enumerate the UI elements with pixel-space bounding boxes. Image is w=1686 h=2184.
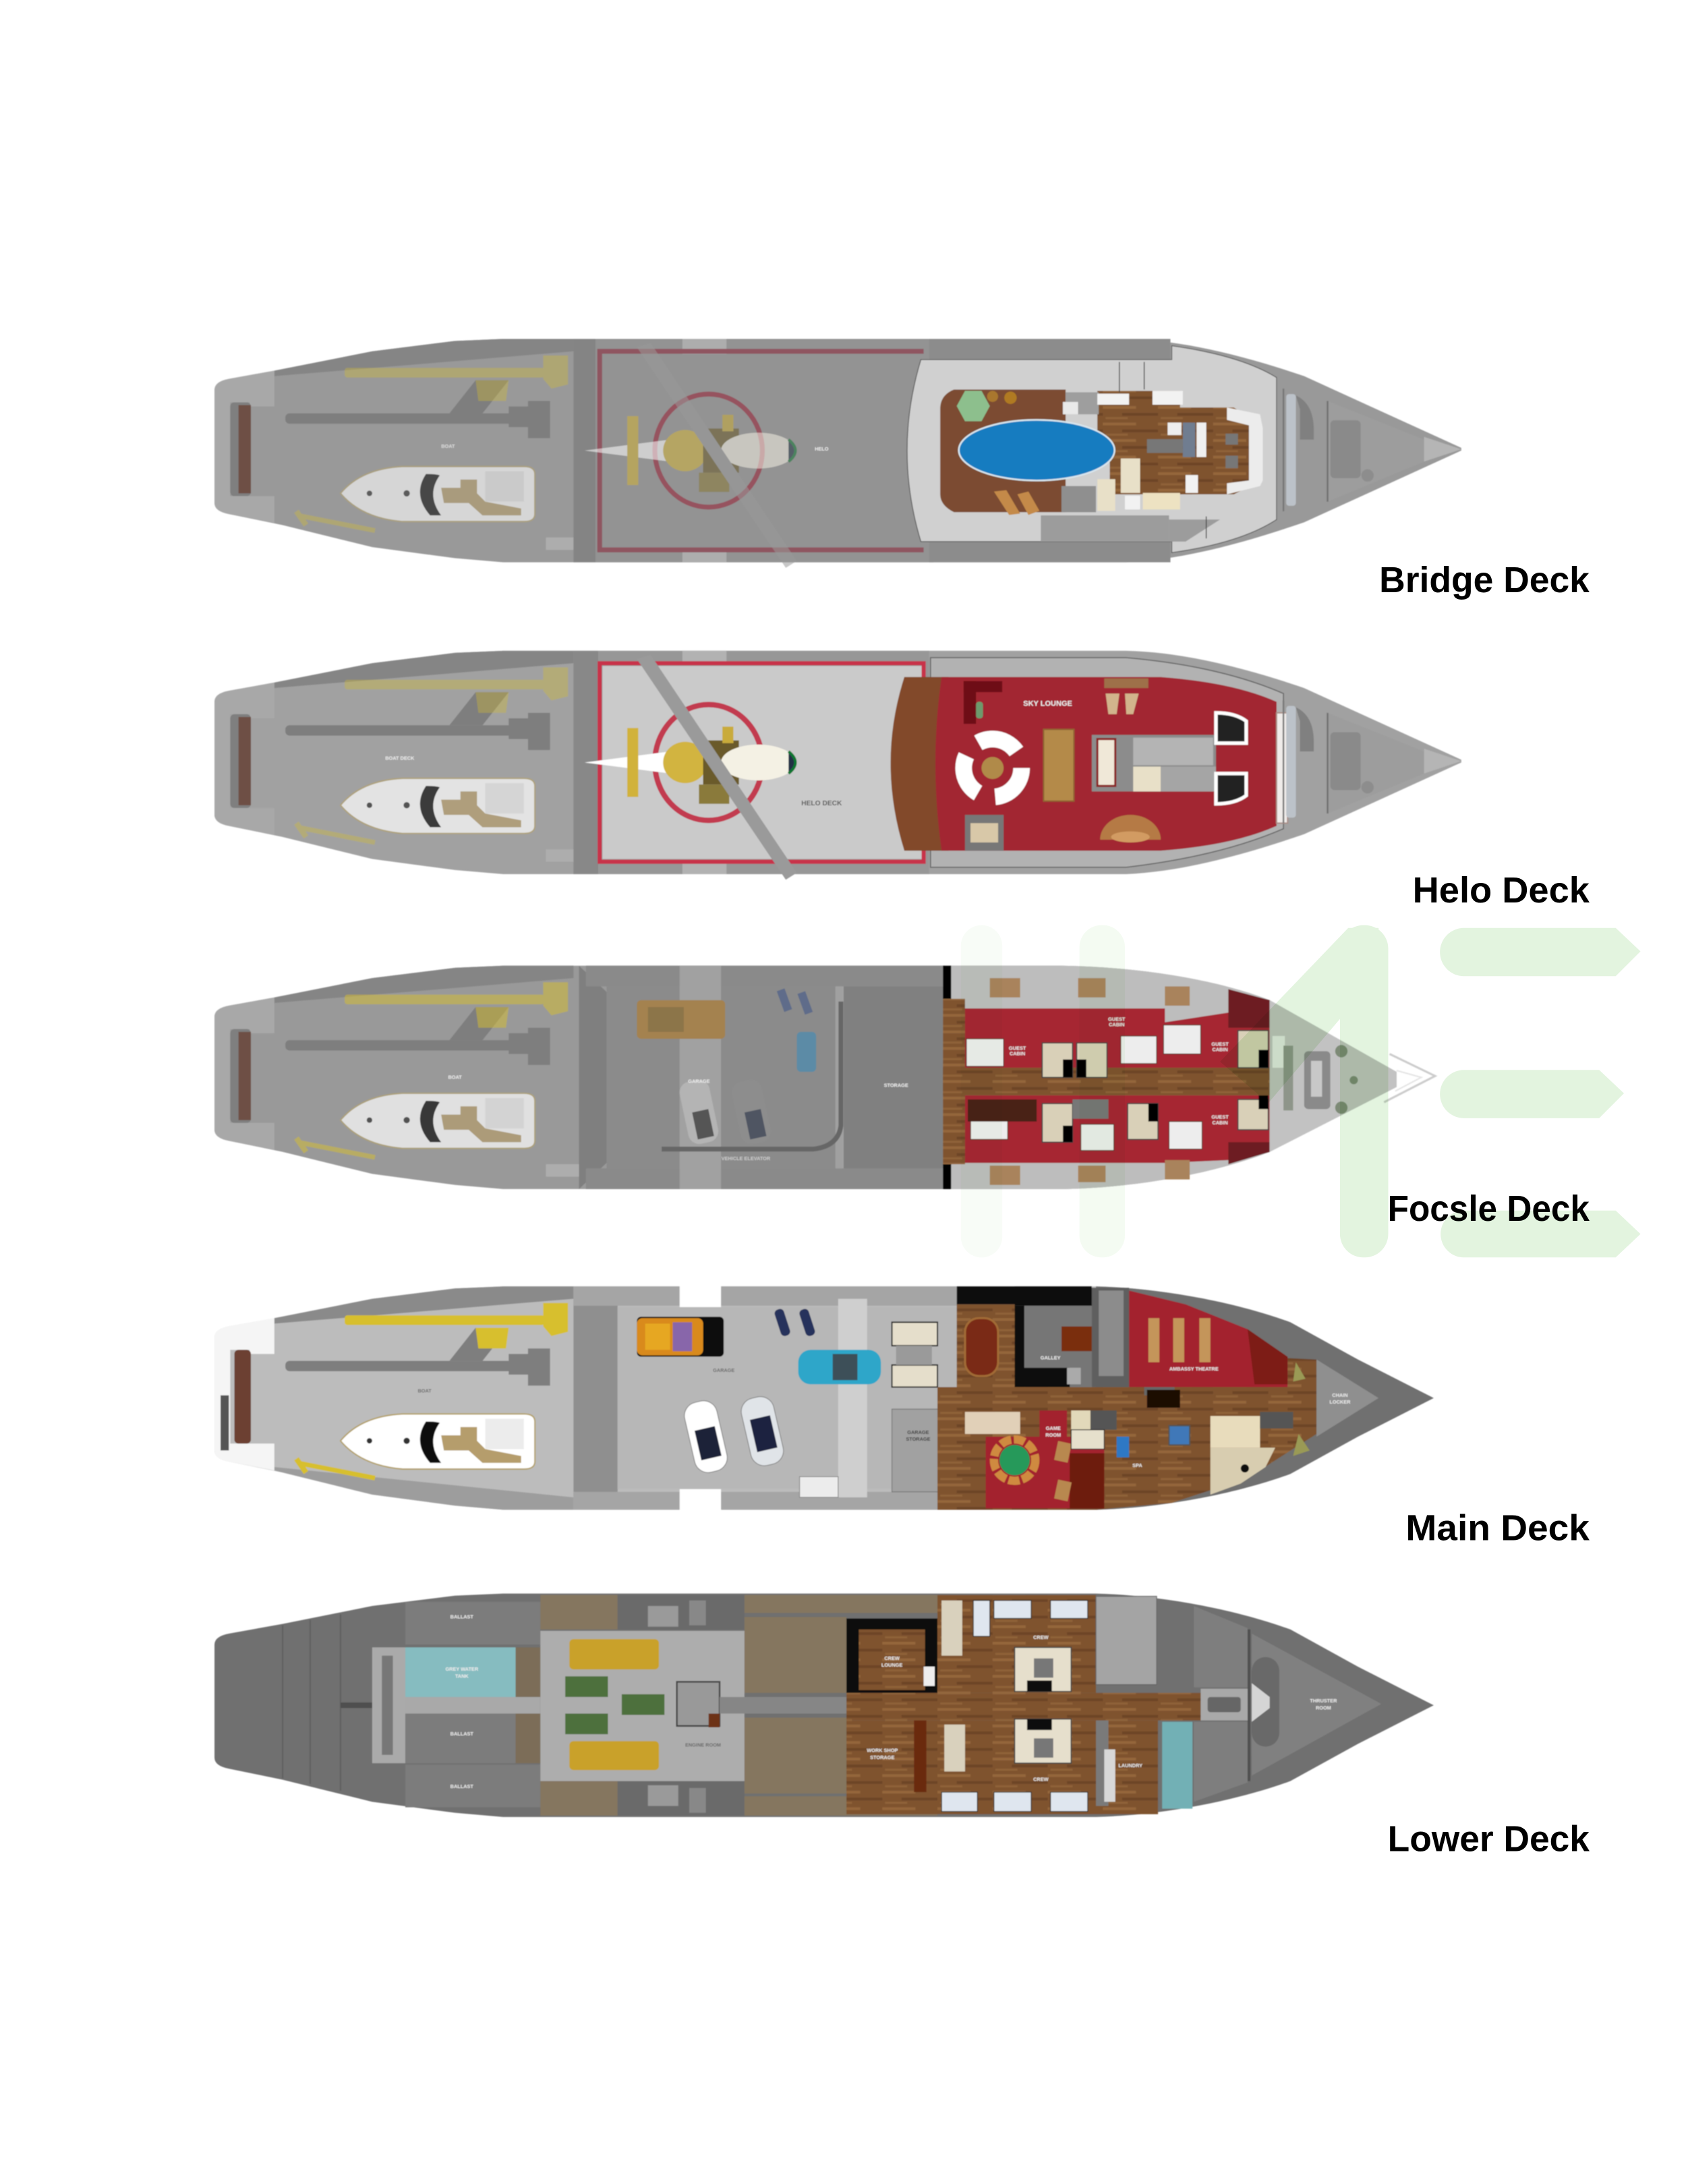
game room: GAME — [1046, 1425, 1061, 1431]
beds and bathrooms: GUEST — [1009, 1045, 1026, 1051]
hull — [214, 1286, 1434, 1510]
crew cabins: WORK SHOP — [867, 1748, 898, 1754]
interior wood — [937, 1304, 1316, 1510]
sun deck wood — [940, 390, 1066, 512]
label: Lower Deck: Lower Deck — [1388, 1820, 1590, 1860]
interior furnishings: SKY LOUNGE — [1023, 700, 1072, 708]
beds and bathrooms: CABIN — [1010, 1051, 1025, 1057]
storage panel: GARAGE — [907, 1429, 929, 1435]
hull — [214, 651, 1461, 874]
aft tanks: BALLAST — [450, 1783, 473, 1789]
aft boat deck — [214, 651, 591, 862]
beds and bathrooms: GUEST — [1108, 1016, 1126, 1023]
dining table — [1043, 729, 1074, 801]
bow compartment — [1249, 1630, 1381, 1781]
bow compartment: THRUSTER — [1310, 1698, 1337, 1704]
watermark — [961, 925, 1641, 1257]
crew cabins — [867, 1601, 1088, 1812]
bow compartment: ROOM — [1316, 1704, 1331, 1711]
crew area wood — [846, 1595, 1200, 1814]
galley: GALLEY — [1041, 1355, 1061, 1361]
aft boat deck: BOAT — [448, 1074, 462, 1080]
icon: plants — [1293, 1362, 1310, 1456]
label: Helo Deck: Helo Deck — [1413, 871, 1590, 911]
laundry: LAUNDRY — [1118, 1762, 1142, 1769]
garage: VEHICLE ELEVATOR — [722, 1155, 771, 1161]
deck plan: Focsle Deck — [214, 966, 1435, 1189]
icon: engines — [569, 1639, 659, 1770]
storage panel — [892, 1409, 957, 1492]
theatre — [1129, 1290, 1287, 1408]
helipad — [573, 651, 929, 880]
beds and bathrooms: CABIN — [1212, 1046, 1228, 1052]
sky lounge carpet — [935, 677, 1277, 851]
vehicle: blue car — [798, 1350, 881, 1384]
label: Focsle Deck: Focsle Deck — [1388, 1189, 1590, 1229]
forward lower wedge — [1169, 519, 1220, 542]
vehicle: motorcycles — [774, 1308, 816, 1337]
helipad: HELO — [815, 446, 829, 452]
side decks — [931, 658, 1283, 867]
icon: crew gensets — [565, 1676, 664, 1734]
chain locker bow: LOCKER — [1329, 1399, 1351, 1405]
crew cabins: STORAGE — [870, 1754, 894, 1760]
forward side panels — [1194, 1606, 1248, 1802]
crew lounge: LOUNGE — [881, 1662, 902, 1668]
lower grey area — [1041, 515, 1169, 542]
forward bow band — [1096, 1286, 1434, 1510]
owner suite: SPA — [1132, 1462, 1142, 1468]
garage: STORAGE — [884, 1083, 908, 1089]
stern platform — [214, 1286, 573, 1510]
garage — [573, 1284, 957, 1512]
curved bars — [1216, 713, 1246, 804]
bow foredeck — [1270, 1000, 1435, 1152]
circular sofa — [964, 739, 1022, 797]
superstructure — [907, 346, 1277, 552]
engine room — [540, 1631, 745, 1781]
service compartments — [618, 1595, 745, 1816]
aft tanks: BALLAST — [450, 1731, 473, 1737]
deck plan: Bridge Deck — [214, 339, 1461, 568]
chain locker bow — [1316, 1360, 1378, 1437]
theatre: AMBASSY THEATRE — [1169, 1366, 1219, 1372]
deck plan: Helo Deck — [214, 651, 1461, 880]
teak deck — [891, 677, 948, 851]
interior furnishings — [964, 679, 1149, 851]
hull — [214, 339, 1461, 563]
aft boat deck — [214, 966, 591, 1177]
crew vehicles — [892, 1322, 937, 1387]
crew lounge — [846, 1618, 937, 1693]
aft boat deck: BOAT DECK — [385, 755, 415, 761]
interior wood — [1097, 391, 1250, 494]
crew mess — [957, 1286, 1014, 1376]
tan fuel tanks — [540, 1595, 937, 1816]
crew cabins: CREW — [1033, 1777, 1049, 1783]
aft tanks: GREY WATER — [445, 1666, 479, 1672]
deck plan: Main Deck — [214, 1284, 1434, 1512]
label: Bridge Deck: Bridge Deck — [1379, 561, 1590, 600]
kitchen block — [1092, 735, 1216, 791]
bow foredeck — [1283, 700, 1461, 823]
interior fixtures — [1062, 362, 1262, 538]
aft boat deck — [214, 339, 591, 550]
machinery and corridor — [677, 1682, 846, 1748]
superstructure interior — [940, 362, 1262, 538]
teal tank — [1162, 1722, 1192, 1809]
beds and bathrooms: CABIN — [1212, 1120, 1228, 1126]
beds and bathrooms: CABIN — [1109, 1022, 1124, 1028]
crew cabins: CREW — [1033, 1634, 1049, 1640]
helipad — [573, 339, 933, 568]
label: Main Deck: Main Deck — [1405, 1508, 1590, 1548]
guest cabin carpet — [960, 1000, 1270, 1163]
light grey store — [1096, 1597, 1157, 1685]
owner suite — [1071, 1410, 1293, 1495]
hull — [214, 1594, 1434, 1817]
aft tanks: BALLAST — [450, 1613, 473, 1619]
storage panel: STORAGE — [906, 1436, 931, 1442]
forward windows — [1277, 713, 1287, 823]
aft tanks: TANK — [455, 1673, 469, 1679]
wooden corridor — [943, 999, 1271, 1164]
anchor corridor — [1200, 1689, 1250, 1721]
beds and bathrooms: GUEST — [1211, 1114, 1229, 1120]
garage: GARAGE — [713, 1367, 734, 1373]
garage: GARAGE — [688, 1079, 710, 1085]
vehicle: white cars — [682, 1394, 786, 1475]
galley — [1014, 1286, 1129, 1387]
swimming pool — [959, 420, 1115, 480]
helipad: HELO DECK — [801, 800, 842, 807]
oval bow thruster — [1252, 1657, 1279, 1747]
game room — [965, 1410, 1104, 1508]
laundry — [1096, 1721, 1142, 1806]
boat deck: BOAT — [417, 1388, 432, 1394]
bow foredeck — [1283, 389, 1461, 511]
chain locker bow: CHAIN — [1332, 1392, 1348, 1398]
icon: sun loungers — [987, 391, 1039, 515]
aft tanks — [283, 1602, 540, 1808]
crew lounge: CREW — [884, 1655, 900, 1661]
hull — [214, 966, 1397, 1189]
boat deck — [285, 1303, 568, 1478]
black bulkhead — [943, 966, 951, 1189]
deck plan: Lower Deck — [214, 1594, 1434, 1817]
garage — [579, 966, 944, 1189]
beds and bathrooms — [966, 978, 1270, 1185]
vehicle: orange truck — [637, 1317, 724, 1356]
game room: ROOM — [1045, 1432, 1061, 1438]
machinery and corridor: ENGINE ROOM — [685, 1742, 721, 1748]
icon: green umbrella — [957, 391, 990, 422]
forward side decks — [951, 966, 1270, 1189]
side decks — [929, 339, 1170, 563]
round lounge sofa — [1100, 815, 1161, 842]
beds and bathrooms: GUEST — [1211, 1041, 1229, 1047]
aft boat deck: BOAT — [441, 443, 455, 449]
